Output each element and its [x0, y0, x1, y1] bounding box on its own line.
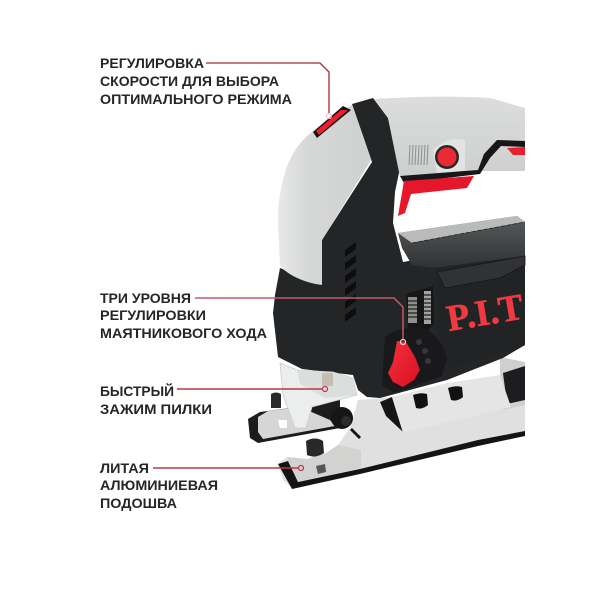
speed switch [313, 106, 351, 138]
callout text [100, 460, 218, 511]
middle aluminium carriage [380, 357, 525, 433]
body vent slots [345, 242, 356, 322]
brand logo: P.I.T [444, 287, 527, 340]
clear blade guard [280, 363, 357, 428]
callout text [100, 290, 267, 341]
callout text [100, 55, 292, 107]
callout text: АЛЮМИНИЕВАЯ [100, 477, 218, 493]
rear base plate [248, 392, 340, 443]
callout text: ЗАЖИМ ПИЛКИ [100, 401, 212, 417]
handle vent [409, 145, 428, 165]
jigsaw tool illustration [248, 97, 527, 489]
red handle button [433, 139, 465, 174]
leader line [206, 63, 332, 118]
leader line [177, 386, 328, 392]
callout text [100, 382, 212, 417]
callout text: ТРИ УРОВНЯ [100, 290, 191, 306]
callout: cast sole [100, 460, 304, 511]
callout: blade clamp [100, 382, 328, 417]
callout text: ОПТИМАЛЬНОГО РЕЖИМА [100, 91, 292, 107]
depth knob [306, 438, 324, 457]
callout text: ПОДОШВА [100, 495, 177, 511]
leader line [195, 298, 406, 344]
pendulum dial [382, 327, 447, 393]
pendulum red lever [388, 341, 420, 387]
leader line [153, 466, 304, 470]
callout text: БЫСТРЫЙ [100, 382, 174, 399]
grey front head [278, 105, 371, 285]
callout: speed control [100, 55, 332, 118]
black and red handle trim [398, 140, 525, 216]
callout text: РЕГУЛИРОВКА [100, 55, 204, 71]
callout text: МАЯТНИКОВОГО ХОДА [100, 325, 267, 341]
roller wheel [331, 407, 361, 439]
speed gear wheel [406, 286, 434, 330]
cast aluminium sole [278, 397, 525, 489]
callout text: РЕГУЛИРОВКИ [100, 307, 206, 323]
callout text: СКОРОСТИ ДЛЯ ВЫБОРА [100, 73, 279, 89]
motor housing top [398, 216, 525, 372]
main black body [273, 98, 525, 398]
callout text: ЛИТАЯ [100, 460, 149, 476]
callout: pendulum levels [100, 290, 406, 344]
grey handle [374, 97, 525, 177]
